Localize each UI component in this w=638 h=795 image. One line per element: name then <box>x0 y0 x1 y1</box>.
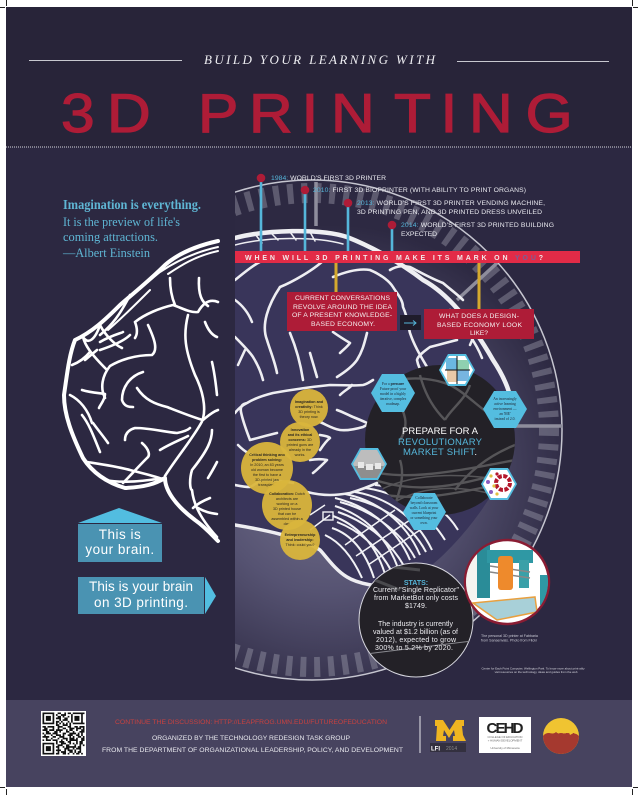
timeline: 2010: FIRST 3D BIOPRINTER (WITH ABILITY TO PRINT ORGANS) <box>313 187 526 194</box>
circle: collaboration <box>262 480 312 530</box>
circle: entrepreneurship: and leadership: <box>286 538 314 542</box>
circle: collaboration: 3D printed house <box>273 507 301 511</box>
question bar <box>235 251 580 263</box>
circle: collaboration: working on a <box>277 502 298 506</box>
logo: CEHD <box>479 717 531 753</box>
circle: innovation: and its ethical <box>288 433 312 437</box>
callout: design-based economy: BASED ECONOMY LOOK <box>437 322 522 329</box>
hex image: blueprint <box>439 354 475 386</box>
circle: critical thinking: 3D-printed jaw <box>255 478 279 482</box>
circle: collaboration: Collaboration: Dutch <box>269 492 305 496</box>
hex image: molecule <box>481 468 517 500</box>
logo: Minnesota M <box>430 720 466 752</box>
stats circle <box>352 563 480 677</box>
callout: this is your brain: your brain. <box>85 542 155 557</box>
source note: Center for Each Point Computer, Wellington Park. To know more about print-ably <box>481 666 585 670</box>
hex: pressure: roadmap. <box>386 402 400 406</box>
central circle <box>365 365 515 515</box>
circle: innovation <box>280 422 320 462</box>
hex: increasingly active learning: environment — <box>493 407 517 411</box>
hex: pressure: For a pressure <box>382 382 404 386</box>
hex: collaborate: or something your <box>410 516 438 520</box>
stats circle: 300% to 5.2% by 2020. <box>375 645 453 652</box>
photo: 3D printer <box>465 540 549 624</box>
circle: imagination: 3D printing is <box>298 410 320 414</box>
central circle: REVOLUTIONARY <box>398 437 483 448</box>
footer text <box>102 719 403 754</box>
your brain illustration <box>64 241 218 541</box>
hex: pressure <box>371 374 415 412</box>
hex: increasingly active learning: active learning <box>494 402 516 406</box>
footer text: ORGANIZED BY THE TECHNOLOGY REDESIGN TASK GROUP <box>152 735 350 742</box>
header band <box>6 7 632 147</box>
circle: innovation: printed guns are <box>287 443 313 447</box>
source note: visit resources on the technology, ideas and guides from the web <box>495 670 578 674</box>
hex: pressure: Future proof your <box>380 387 407 391</box>
callout: current conversations: OF A PRESENT KNOWLEDGE- <box>292 312 392 319</box>
circle: critical thinking: transplant. <box>258 483 276 487</box>
hex: increasingly active learning: instead of 2.0. <box>495 417 516 421</box>
circle: entrepreneurship: Think: could you? <box>286 543 314 547</box>
hex: collaborate <box>403 493 446 530</box>
circle: innovation: already in the <box>289 448 311 452</box>
hex image: printed building <box>350 448 390 480</box>
timeline: 1984: WORLD'S FIRST 3D PRINTER <box>271 175 386 182</box>
callout: current conversations: CURRENT CONVERSATIONS <box>295 295 390 302</box>
hex: increasingly active learning: an 'ME' <box>499 412 511 416</box>
source note <box>481 666 585 674</box>
circle: critical thinking: Critical thinking and <box>249 453 285 457</box>
arrow <box>400 315 421 330</box>
logo: Minnesota M: 2014 <box>446 746 457 752</box>
hex: collaborate: current blueprint <box>412 511 436 515</box>
logo: CEHD: COLLEGE OF EDUCATION <box>488 735 522 739</box>
stats circle: $1749. <box>405 603 427 610</box>
circle: critical thinking <box>241 442 293 494</box>
central circle: MARKET SHIFT. <box>403 447 477 458</box>
hex: pressure: iterative, complex <box>380 397 406 402</box>
right brain shape <box>235 231 515 586</box>
circle: collaboration: architects are <box>276 497 298 501</box>
brain on 3D printing panel <box>235 179 563 681</box>
hex: collaborate: Collaborate <box>415 496 433 500</box>
quote <box>62 197 201 260</box>
hex: collaborate: walls. Look at your <box>410 506 439 510</box>
circle: innovation: Innovation <box>291 428 310 432</box>
callout: this is your brain on 3D printing <box>78 577 216 614</box>
photo caption: The personal 3D printer at Fabbaria <box>481 634 538 638</box>
circle: collaboration: that can be <box>278 512 296 516</box>
callout: this is your brain <box>78 508 162 562</box>
callout: design-based economy <box>424 309 534 339</box>
photo caption: from Sanaenvals. Photo from Flickr <box>481 638 538 642</box>
circle: innovation: concerns: 3D <box>288 438 312 442</box>
stats circle: The industry is currently <box>378 621 454 628</box>
hex: pressure: model in a highly <box>380 392 406 396</box>
logo: CEHD: + HUMAN DEVELOPMENT <box>488 738 523 742</box>
quote: —Albert Einstein <box>62 245 150 260</box>
callout: design-based economy: WHAT DOES A DESIGN- <box>439 313 519 320</box>
quote: Imagination is everything. <box>63 197 201 212</box>
callout: current conversations: REVOLVE AROUND THE IDEA <box>293 304 392 311</box>
circle: critical thinking: problem solving: <box>252 458 282 462</box>
callout: this is your brain on 3D printing: This is your brain <box>89 579 193 594</box>
quote: coming attractions. <box>63 229 158 244</box>
central circle: PREPARE FOR A <box>402 426 479 437</box>
timeline <box>257 174 554 251</box>
timeline: 2014: WORLD'S FIRST 3D PRINTED BUILDING <box>401 222 554 229</box>
circle: critical thinking: old woman became <box>251 468 283 472</box>
logo: CARPA <box>543 718 579 754</box>
logo: CEHD: CEHD <box>486 720 524 737</box>
circle: critical thinking: In 2010, an 83 years <box>250 463 284 467</box>
circle: imagination: creativity: Think <box>295 405 323 409</box>
cerebellum <box>310 485 458 578</box>
callout: current conversations <box>287 292 397 331</box>
decision circles <box>241 389 328 560</box>
QR code <box>41 711 86 756</box>
callout: this is your brain: This is <box>99 527 141 542</box>
circle: critical thinking: the first to have a <box>253 473 282 477</box>
circle: imagination: Imagination and <box>295 400 324 404</box>
logo: CARPA: CARPA <box>546 733 576 740</box>
quote: It is the preview of life's <box>63 214 180 229</box>
right brain folds <box>235 231 515 586</box>
hex: collaborate: beyond classroom <box>411 501 437 505</box>
timeline: 3D PRINTING PEN, AND 3D PRINTED DRESS UNVEILED <box>357 209 542 216</box>
stats circle: from MarketBot only costs <box>374 595 458 602</box>
logo: CEHD: University of Minnesota <box>490 746 520 750</box>
timeline: EXPECTED <box>401 231 437 238</box>
circle: entrepreneurship <box>280 520 320 560</box>
callout: current conversations: BASED ECONOMY. <box>311 321 375 328</box>
circle: imagination <box>290 389 328 427</box>
stats circle: 2012), expected to grow <box>376 637 457 644</box>
hex: collaborate: own. <box>420 521 428 525</box>
timeline: 2013: WORLD'S FIRST 3D PRINTER VENDING MACHINE, <box>357 200 545 207</box>
hex: increasingly active learning <box>483 391 527 428</box>
question bar: WHEN WILL 3D PRINTING MAKE ITS MARK ON YOU ? <box>245 255 543 262</box>
callout: design-based economy: LIKE? <box>470 330 488 337</box>
callout: this is your brain on 3D printing: on 3D printing. <box>94 595 188 610</box>
footer text: CONTINUE THE DISCUSSION: HTTP://LEAPFROG.UMN.EDU/FUTUREOFEDUCATION <box>115 719 387 726</box>
circle: entrepreneurship: Entrepreneurship <box>285 533 316 537</box>
title: 3D PRINTING <box>61 83 573 144</box>
circle: imagination: theory now. <box>300 415 318 419</box>
connector lines <box>336 263 479 309</box>
circle: collaboration: day. <box>284 522 290 526</box>
stats circle: STATS: <box>404 580 428 587</box>
footer band <box>6 700 632 787</box>
subtitle: BUILD YOUR LEARNING WITH <box>204 52 436 67</box>
hex: increasingly active learning: An increasingly <box>493 397 517 401</box>
circle: innovation: works. <box>295 453 305 457</box>
photo caption <box>481 634 538 642</box>
circle: collaboration: assembled within a <box>271 517 304 521</box>
stats circle: Current "Single Replicator" <box>373 587 460 594</box>
stats circle: valued at $1.2 billion (as of <box>373 629 458 636</box>
logo: Minnesota M: LFI <box>431 746 440 752</box>
footer text: FROM THE DEPARTMENT OF ORGANIZATIONAL LEADERSHIP, POLICY, AND DEVELOPMENT <box>102 747 403 754</box>
